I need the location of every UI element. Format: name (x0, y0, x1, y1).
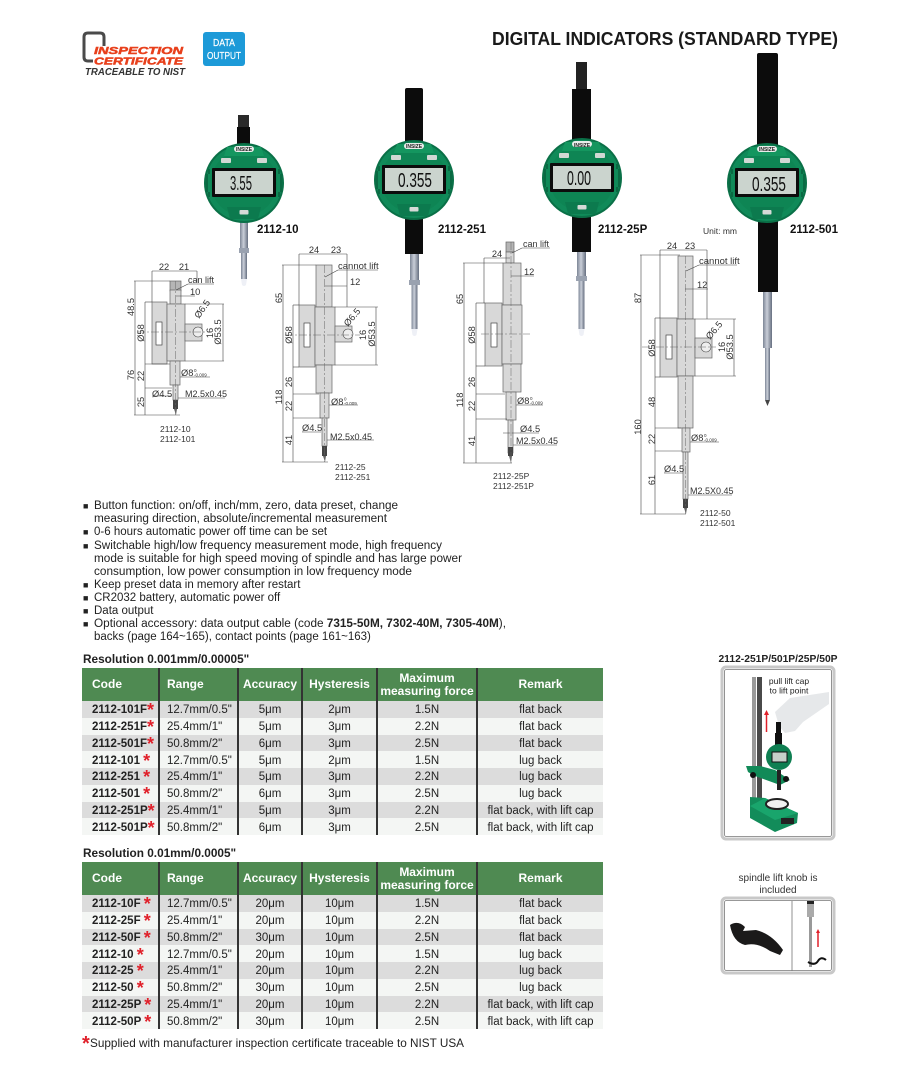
table data rows: flat back, with lift cap (487, 1016, 594, 1028)
table data rows: 2112-101 * (92, 750, 150, 770)
drawing 2112-10: Ø6.5 (192, 298, 212, 320)
table header row: measuring force (380, 684, 474, 698)
table data rows: 5μm (259, 721, 281, 733)
drawing 2112-50: 12 (697, 280, 707, 290)
drawing 2112-25: 12 (350, 277, 360, 287)
feature list: Data output (94, 605, 154, 617)
drawing 2112-50: 48 (647, 397, 657, 407)
panel: lift cap photo: to lift point (770, 686, 809, 696)
feature list: Optional accessory: data output cable (code 7315-50M, 7302-40M, 7305-40M ), (94, 618, 506, 630)
badge: data output: DATA (213, 38, 235, 49)
feature list: ■ (83, 593, 88, 603)
drawing 2112-10: 25 (136, 397, 146, 407)
table data rows: 2.5N (415, 822, 439, 834)
drawing 2112-25: M2.5x0.45 (330, 432, 372, 442)
table data rows: 20μm (256, 898, 284, 910)
feature list: Keep preset data in memory after restart (94, 579, 301, 591)
indicator photo 2112-251 (374, 88, 454, 336)
table data rows: 2112-10 * (92, 944, 144, 964)
table data rows: 6μm (259, 738, 281, 750)
table data rows: 3μm (328, 788, 351, 800)
drawing 2112-10: 2112-10 (160, 424, 191, 434)
panel: lift cap photo (722, 667, 834, 839)
panel: lift cap photo: pull lift cap (769, 676, 809, 686)
table header row: Maximum (399, 670, 455, 684)
drawing 2112-10: can lift (188, 275, 215, 285)
table data rows: 2112-25 * (92, 961, 144, 981)
drawing 2112-25: 22 (284, 401, 294, 411)
table data rows: lug back (519, 754, 562, 766)
table data rows: 2112-501 * (92, 784, 150, 804)
table data rows: 3μm (328, 805, 351, 817)
table data rows: 2112-50F * (92, 928, 151, 948)
table data rows: 2.5N (415, 738, 439, 750)
drawing 2112-10: -0.009 (194, 372, 207, 378)
table data rows: 2112-50 * (92, 978, 144, 998)
feature list: 0-6 hours automatic power off time can be set (94, 526, 328, 538)
table header row: Range (167, 677, 204, 691)
table header row (82, 668, 603, 701)
table data rows: 20μm (256, 915, 284, 927)
table data rows: 50.8mm/2" (167, 1016, 222, 1028)
table data rows: 3μm (328, 738, 351, 750)
drawing 2112-25: 24 (309, 245, 319, 255)
feature list: ■ (83, 541, 88, 551)
drawing 2112-25P: 0 (530, 396, 533, 401)
indicator photo 2112-501: 0.355 (752, 174, 786, 196)
table data rows: 1.5N (415, 948, 439, 960)
feature list: consumption, low power consumption in low frequency mode (94, 566, 412, 578)
drawing 2112-10: 76 (126, 370, 136, 380)
table data rows: 30μm (256, 932, 284, 944)
table data rows: 20μm (256, 999, 284, 1011)
table data rows: 50.8mm/2" (167, 738, 222, 750)
feature list: Button function: on/off, inch/mm, zero, data preset, change (94, 500, 398, 512)
table data rows: 1.5N (415, 754, 439, 766)
drawing 2112-25: Ø53.5 (367, 321, 377, 347)
table header row: Range (167, 871, 204, 885)
drawing 2112-25P: 41 (467, 436, 477, 446)
drawing 2112-25: 2112-25 (335, 462, 366, 472)
table data rows: 2.5N (415, 982, 439, 994)
drawing 2112-50: Ø6.5 (704, 319, 724, 341)
drawing 2112-10 (126, 262, 227, 444)
table data rows: 10μm (325, 999, 354, 1011)
drawing 2112-50: 22 (647, 434, 657, 444)
drawing 2112-25P: 22 (467, 401, 477, 411)
table data rows: 2.5N (415, 1016, 439, 1028)
table data rows: 12.7mm/0.5" (167, 704, 232, 716)
drawing 2112-25: 118 (274, 390, 284, 404)
table data rows: 6μm (259, 788, 281, 800)
table data rows: flat back (519, 932, 562, 944)
drawing 2112-25: Ø58 (284, 326, 294, 344)
logo: inspection certificate: TRACEABLE TO NIST (85, 67, 186, 78)
drawing 2112-50: cannot lift (699, 256, 740, 267)
drawing 2112-50: 2112-50 (700, 508, 731, 518)
title: DIGITAL INDICATORS (STANDARD TYPE) (492, 29, 838, 49)
table data rows: 10μm (325, 1016, 354, 1028)
table header row: Code (92, 677, 122, 691)
drawing 2112-10: Ø53.5 (213, 319, 223, 345)
drawing 2112-50: Ø53.5 (725, 334, 735, 360)
drawing 2112-50: 16 (717, 342, 727, 352)
label 2112-501: 2112-501 (790, 224, 839, 236)
table data rows: 10μm (325, 982, 354, 994)
table data rows: 2μm (328, 754, 351, 766)
table header row: Accuracy (243, 871, 297, 885)
table data rows: 2112-501P* (92, 818, 155, 838)
table data rows: 25.4mm/1" (167, 805, 222, 817)
table data rows: 2112-25F * (92, 911, 151, 931)
table data rows: 2112-251F* (92, 717, 154, 737)
table: resolution 0.01mm (82, 862, 603, 1032)
table data rows: 2112-101F* (92, 700, 154, 720)
table data rows: 50.8mm/2" (167, 982, 222, 994)
table data rows: 10μm (325, 965, 354, 977)
indicator photo 2112-501 (727, 53, 807, 406)
drawing 2112-25: Ø4.5 (302, 423, 322, 433)
table data rows: 2112-50P * (92, 1012, 151, 1032)
drawing 2112-10: 48.5 (126, 298, 136, 316)
table heading: resolution 0.01: Resolution 0.01mm/0.0005" (83, 846, 236, 860)
drawing 2112-25P: 24 (492, 249, 502, 259)
logo: inspection certificate (84, 33, 186, 78)
table data rows: 2112-10F * (92, 894, 151, 914)
table header row: Remark (518, 677, 563, 691)
table data rows: lug back (519, 982, 562, 994)
table data rows (82, 700, 603, 838)
table data rows: 50.8mm/2" (167, 788, 222, 800)
drawing 2112-10: 10 (190, 287, 200, 297)
drawing 2112-25: 65 (274, 293, 284, 303)
table data rows: 5μm (259, 704, 281, 716)
table data rows: 1.5N (415, 704, 439, 716)
table data rows: flat back, with lift cap (487, 999, 594, 1011)
table data rows: flat back, with lift cap (487, 805, 594, 817)
drawing 2112-25: -0.009 (344, 401, 357, 406)
drawing 2112-25P: M2.5x0.45 (516, 436, 558, 446)
feature list: Switchable high/low frequency measurement mode, high frequency (94, 540, 442, 552)
badge: data output: OUTPUT (207, 51, 241, 62)
indicator photo 2112-10 (204, 115, 284, 286)
table data rows: 12.7mm/0.5" (167, 948, 232, 960)
panel heading: spindle lift knob: included (759, 885, 797, 896)
table: resolution 0.001mm (82, 668, 603, 838)
panel heading: spindle lift knob: spindle lift knob is (739, 873, 817, 884)
panel heading: spindle lift knob (739, 873, 817, 896)
drawing 2112-10: 16 (205, 328, 215, 338)
drawing 2112-10: 22 (136, 371, 146, 381)
drawing 2112-25P: 65 (455, 294, 465, 304)
label 2112-251: 2112-251 (438, 224, 487, 236)
table data rows: lug back (519, 788, 562, 800)
indicator photo 2112-10: 3.55 (230, 173, 252, 195)
badge: data output (203, 32, 245, 66)
drawing 2112-25P: -0.009 (530, 400, 543, 406)
indicator photo 2112-501: INSIZE (759, 147, 776, 153)
drawing 2112-10: Ø58 (136, 324, 146, 342)
table header row: Maximum (399, 864, 455, 878)
table data rows: 2.2N (415, 721, 439, 733)
drawing 2112-50: Ø58 (647, 339, 657, 357)
drawing 2112-25P: 118 (455, 393, 465, 407)
feature list: measuring direction, absolute/incremental measurement (94, 513, 388, 525)
table data rows: 10μm (325, 915, 354, 927)
table data rows: 20μm (256, 965, 284, 977)
table data rows: 25.4mm/1" (167, 999, 222, 1011)
footnote: Supplied with manufacturer inspection certificate traceable to NIST USA (90, 1036, 464, 1050)
drawing 2112-50: 2112-501 (700, 518, 736, 528)
table data rows: 2112-251 * (92, 767, 150, 787)
table data rows: flat back (519, 898, 562, 910)
unit note: Unit: mm (703, 226, 737, 236)
table data rows: 10μm (325, 898, 354, 910)
drawing 2112-25 (274, 245, 379, 482)
feature list: ■ (83, 580, 88, 590)
drawing 2112-25P: can lift (523, 239, 550, 249)
feature list: ■ (83, 619, 88, 629)
drawing 2112-50: Ø8 (691, 433, 703, 443)
drawing 2112-50 (633, 241, 740, 528)
drawing 2112-25P: Ø4.5 (520, 424, 540, 434)
table header row (82, 862, 603, 895)
table data rows: 2.2N (415, 805, 439, 817)
table data rows (82, 894, 603, 1032)
table heading: resolution 0.001: Resolution 0.001mm/0.00005" (83, 652, 249, 666)
label 2112-10: 2112-10 (257, 224, 299, 236)
drawing 2112-50: 24 (667, 241, 677, 251)
table data rows: flat back (519, 915, 562, 927)
drawing 2112-50: -0.009 (704, 438, 717, 442)
footnote (82, 1033, 464, 1055)
table data rows: 3μm (328, 822, 351, 834)
table data rows: 2.2N (415, 771, 439, 783)
label 2112-25P: 2112-25P (598, 224, 648, 236)
table data rows: flat back (519, 738, 562, 750)
table data rows: 25.4mm/1" (167, 965, 222, 977)
table data rows: 2112-25P * (92, 995, 151, 1015)
drawing 2112-50: 23 (685, 241, 695, 251)
panel heading: lift cap models: 2112-251P/501P/25P/50P (718, 654, 838, 665)
drawing 2112-25: Ø8 (331, 397, 343, 407)
table data rows: lug back (519, 771, 562, 783)
drawing 2112-10: 0 (194, 368, 197, 373)
drawing 2112-25: 23 (331, 245, 341, 255)
drawing 2112-10: 2112-101 (160, 434, 196, 444)
table data rows: 50.8mm/2" (167, 932, 222, 944)
table data rows: 25.4mm/1" (167, 771, 222, 783)
indicator photo 2112-251: 0.355 (398, 170, 432, 192)
table data rows: lug back (519, 948, 562, 960)
drawing 2112-25P: 12 (524, 267, 534, 277)
table data rows: 3μm (328, 771, 351, 783)
table data rows: 25.4mm/1" (167, 915, 222, 927)
drawing 2112-50: 160 (633, 419, 643, 435)
feature list: ■ (83, 606, 88, 616)
drawing 2112-10: M2.5x0.45 (185, 389, 227, 399)
drawing 2112-50: Ø4.5 (664, 464, 684, 474)
table data rows: 2.2N (415, 999, 439, 1011)
table data rows: 50.8mm/2" (167, 822, 222, 834)
drawing 2112-25P: 2112-25P (493, 471, 530, 481)
table data rows: flat back (519, 704, 562, 716)
table header row: measuring force (380, 878, 474, 892)
panel: spindle lift knob photo (722, 898, 834, 973)
feature list: CR2032 battery, automatic power off (94, 592, 281, 604)
feature list (83, 500, 506, 643)
table data rows: 2.2N (415, 965, 439, 977)
table data rows: 5μm (259, 771, 281, 783)
table data rows: 5μm (259, 754, 281, 766)
drawing 2112-50: 87 (633, 293, 643, 303)
table data rows: flat back (519, 721, 562, 733)
table data rows: 12.7mm/0.5" (167, 898, 232, 910)
indicator photo 2112-25P: INSIZE (574, 143, 591, 149)
drawing 2112-25P: 26 (467, 377, 477, 387)
indicator photo 2112-25P (542, 62, 622, 336)
table data rows: 6μm (259, 822, 281, 834)
table header row: Code (92, 871, 122, 885)
table data rows: 30μm (256, 1016, 284, 1028)
drawing 2112-50: 61 (647, 475, 657, 485)
logo: inspection certificate: CERTIFICATE (94, 56, 184, 68)
drawing 2112-25: 16 (358, 330, 368, 340)
table data rows: 2.2N (415, 915, 439, 927)
table header row: Accuracy (243, 677, 297, 691)
drawing 2112-25: cannot lift (338, 261, 379, 272)
drawing 2112-10: Ø4.5 (152, 389, 172, 399)
table data rows: 10μm (325, 932, 354, 944)
indicator photo 2112-10: INSIZE (236, 147, 253, 153)
table data rows: 2.5N (415, 932, 439, 944)
drawing 2112-25: Ø6.5 (342, 306, 362, 328)
table data rows: 2112-501F* (92, 734, 154, 754)
drawing 2112-50: 0 (704, 433, 707, 438)
feature list: backs (page 164~165), contact points (page 161~163) (94, 631, 371, 643)
table data rows: 1.5N (415, 898, 439, 910)
drawing 2112-25P (455, 239, 558, 491)
logo: inspection certificate: INSPECTION (94, 45, 184, 57)
feature list: ■ (83, 501, 88, 511)
table data rows: 12.7mm/0.5" (167, 754, 232, 766)
table data rows: 3μm (328, 721, 351, 733)
indicator photo 2112-25P: 0.00 (567, 168, 591, 190)
drawing 2112-25P: Ø58 (467, 326, 477, 344)
drawing 2112-25: 2112-251 (335, 472, 371, 482)
drawing 2112-25P: 2112-251P (493, 481, 534, 491)
table data rows: 2.5N (415, 788, 439, 800)
drawing 2112-50: M2.5X0.45 (690, 486, 734, 496)
table data rows: 20μm (256, 948, 284, 960)
table data rows: flat back, with lift cap (487, 822, 594, 834)
feature list: ■ (83, 527, 88, 537)
table header row: Remark (518, 871, 563, 885)
table data rows: 30μm (256, 982, 284, 994)
table header row: Hysteresis (309, 677, 370, 691)
drawing 2112-10: 21 (179, 262, 189, 272)
drawing 2112-25: 0 (344, 396, 347, 402)
drawing 2112-10: Ø8 (181, 368, 193, 378)
drawing 2112-25: 41 (284, 435, 294, 445)
feature list: mode is suitable for high speed moving of spindle and has large power (94, 553, 462, 565)
drawing 2112-25P: Ø8 (517, 396, 529, 406)
footnote: * (82, 1033, 90, 1055)
drawing 2112-25: 26 (284, 377, 294, 387)
indicator photo 2112-251: INSIZE (406, 144, 423, 150)
table data rows: 2112-251P* (92, 801, 155, 821)
drawing 2112-10: 22 (159, 262, 169, 272)
table data rows: 25.4mm/1" (167, 721, 222, 733)
table data rows: 2μm (328, 704, 351, 716)
table data rows: lug back (519, 965, 562, 977)
table data rows: 10μm (325, 948, 354, 960)
table header row: Hysteresis (309, 871, 370, 885)
table data rows: 5μm (259, 805, 281, 817)
